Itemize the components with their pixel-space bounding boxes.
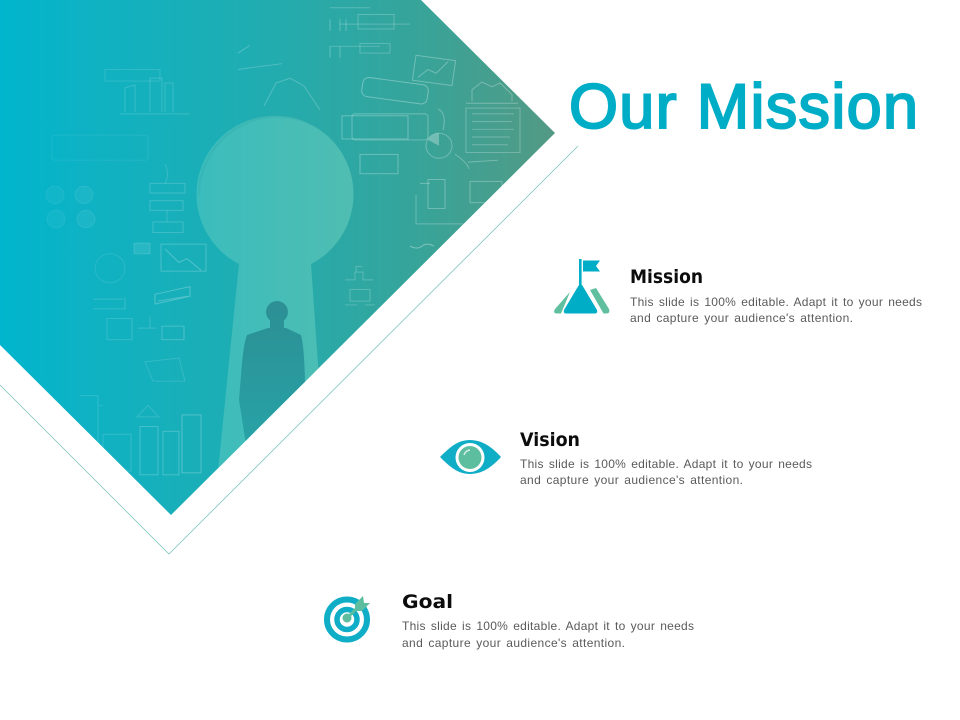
icon: target with arrow bbox=[327, 596, 370, 640]
text: goal description bbox=[402, 619, 694, 650]
text: vision description: and capture your audience's attention. bbox=[520, 473, 743, 487]
text: mission description: and capture your audience's attention. bbox=[630, 311, 853, 325]
heading: mission: Mission bbox=[630, 266, 703, 288]
text: mission description: This slide is 100% editable. Adapt it to your needs bbox=[630, 295, 922, 309]
text: goal description: This slide is 100% editable. Adapt it to your needs bbox=[402, 619, 694, 633]
outline chevron bbox=[0, 146, 578, 554]
heading: goal: Goal bbox=[402, 591, 453, 613]
text: mission description bbox=[630, 295, 922, 325]
item: vision bbox=[440, 429, 812, 487]
text: goal description: and capture your audience's attention. bbox=[402, 636, 625, 650]
panel: diamond photo with keyhole bbox=[0, 0, 560, 520]
business doodles bbox=[46, 8, 520, 475]
text: vision description bbox=[520, 457, 812, 487]
icon: eye bbox=[440, 440, 501, 474]
icon: mountain with flag bbox=[554, 259, 609, 314]
title: Our Mission bbox=[569, 72, 918, 142]
item: goal bbox=[327, 591, 694, 650]
person silhouette bbox=[239, 301, 305, 441]
item: mission bbox=[554, 259, 922, 325]
text: vision description: This slide is 100% editable. Adapt it to your needs bbox=[520, 457, 812, 471]
heading: vision: Vision bbox=[520, 429, 580, 451]
keyhole bbox=[197, 116, 356, 500]
